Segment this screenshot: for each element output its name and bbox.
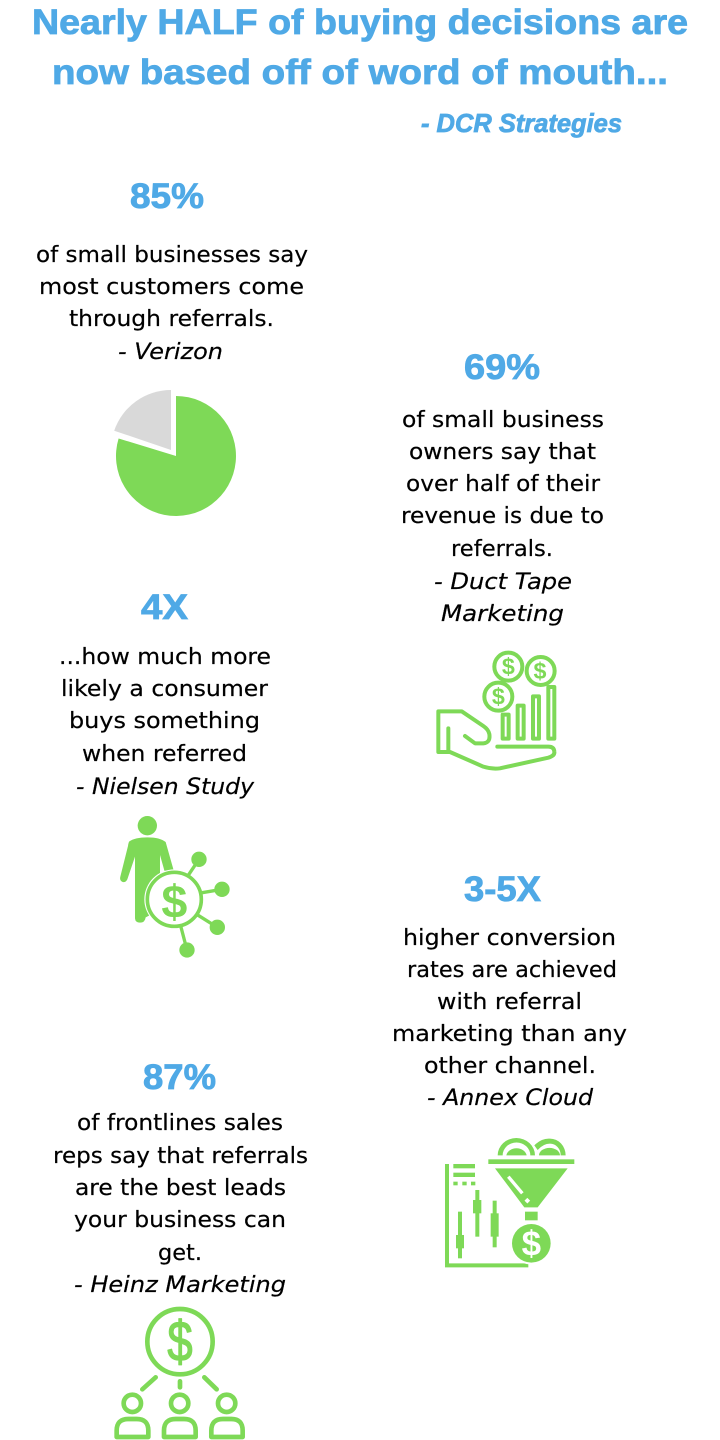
panel: 4X stat bbox=[59, 588, 271, 958]
text block 4X: likely a consumer bbox=[61, 676, 269, 702]
text block 69%: over half of their bbox=[406, 471, 601, 497]
text block 85%: - Verizon bbox=[118, 339, 223, 365]
panel: 87% stat bbox=[53, 1058, 308, 1437]
text block 69%: - Duct Tape bbox=[434, 569, 572, 595]
text block 3-5X: rates are achieved bbox=[407, 957, 617, 983]
pie chart bbox=[114, 390, 236, 516]
text block 4X bbox=[59, 644, 271, 800]
icon: hand with coins and bars: $ bbox=[492, 684, 505, 710]
icon: person with dollar network bbox=[120, 816, 230, 958]
stat number 85%: 85% bbox=[130, 177, 204, 216]
text block 4X: when referred bbox=[82, 741, 247, 767]
title source: - DCR Strategies bbox=[421, 108, 622, 138]
icon: dollar with three people: $ bbox=[167, 1310, 193, 1373]
text block 3-5X bbox=[392, 925, 627, 1111]
text block 4X: buys something bbox=[69, 708, 260, 734]
text block 87% bbox=[53, 1110, 308, 1298]
icon: funnel with chart and coin: $ bbox=[522, 1224, 541, 1263]
text block 69%: revenue is due to bbox=[401, 503, 604, 529]
text block 69%: of small business bbox=[402, 407, 604, 433]
text block 3-5X: other channel. bbox=[424, 1053, 596, 1079]
text block 3-5X: higher conversion bbox=[403, 925, 616, 951]
text block 87%: - Heinz Marketing bbox=[74, 1272, 286, 1298]
text block 3-5X: with referral bbox=[437, 989, 582, 1015]
text block 85%: through referrals. bbox=[69, 306, 274, 332]
panel: 85% stat bbox=[36, 177, 308, 516]
text block 69%: owners say that bbox=[409, 439, 596, 465]
text block 85%: most customers come bbox=[39, 274, 304, 300]
text block 69%: referrals. bbox=[451, 536, 553, 562]
text block 87%: reps say that referrals bbox=[53, 1143, 308, 1169]
stat number 4X: 4X bbox=[141, 588, 189, 627]
title: now based off of word of mouth... bbox=[52, 53, 668, 92]
text block 87%: are the best leads bbox=[75, 1175, 286, 1201]
text block 3-5X: - Annex Cloud bbox=[427, 1085, 594, 1111]
text block 87%: your business can bbox=[74, 1207, 286, 1233]
text block 4X: - Nielsen Study bbox=[76, 774, 255, 800]
icon: hand with coins and bars: $ bbox=[502, 654, 515, 680]
stat number 87%: 87% bbox=[143, 1058, 216, 1097]
icon: funnel with chart and coin bbox=[445, 1138, 574, 1267]
text block 3-5X: marketing than any bbox=[392, 1021, 627, 1047]
icon: dollar with three people bbox=[117, 1309, 243, 1437]
text block 4X: ...how much more bbox=[59, 644, 271, 670]
panel: 69% stat bbox=[401, 348, 604, 769]
text block 85%: of small businesses say bbox=[36, 242, 308, 268]
icon: person with dollar network: $ bbox=[161, 875, 187, 927]
title: Nearly HALF of buying decisions are bbox=[32, 3, 688, 42]
panel: 3-5X stat bbox=[392, 870, 627, 1267]
text block 87%: get. bbox=[158, 1240, 202, 1266]
text block 87%: of frontlines sales bbox=[77, 1110, 283, 1136]
text block 69%: Marketing bbox=[441, 601, 564, 627]
icon: hand with coins and bars: $ bbox=[533, 658, 546, 684]
text block 69% bbox=[401, 407, 604, 627]
stat number 3-5X: 3-5X bbox=[464, 870, 542, 909]
text block 85% bbox=[36, 242, 308, 365]
title bbox=[32, 3, 688, 92]
stat number 69%: 69% bbox=[464, 348, 540, 387]
icon: hand with coins and bars bbox=[438, 653, 555, 769]
